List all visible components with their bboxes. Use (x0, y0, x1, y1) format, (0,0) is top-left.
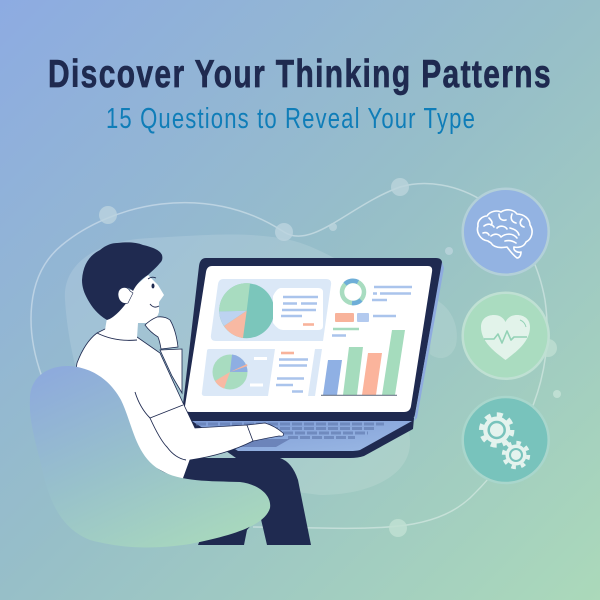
dashboard: top pie panel (211, 279, 331, 341)
network node (391, 178, 409, 196)
person (70, 242, 311, 545)
dashboard: donut chart (342, 281, 364, 303)
raised forearm cuff (160, 349, 182, 393)
network node (99, 206, 117, 224)
torso and shirt (70, 328, 253, 482)
laptop base (186, 418, 414, 458)
keyboard keys (196, 424, 384, 438)
laptop screen (185, 266, 432, 412)
icon: heart with pulse in green circle (463, 293, 549, 379)
hand on chin (145, 317, 178, 349)
dashboard: small colour tags (335, 313, 369, 322)
network node (275, 223, 293, 241)
dashboard: lower pie panel (202, 349, 275, 396)
icon: gears in teal circle (463, 397, 549, 483)
legs (180, 458, 311, 545)
pie chart (219, 283, 274, 338)
laptop keyboard deck (192, 421, 412, 451)
icon: brain in blue circle (463, 189, 549, 275)
armchair (30, 366, 270, 547)
callout card (273, 288, 323, 330)
small pie chart (212, 354, 248, 390)
dashboard: legend lines (332, 287, 412, 336)
bar chart (321, 330, 405, 395)
laptop trackpad (240, 439, 290, 447)
subtitle: 15 Questions to Reveal Your Type (106, 103, 476, 135)
network node (553, 390, 561, 398)
neck and face (105, 275, 164, 338)
laptop (182, 258, 444, 458)
network node (445, 247, 453, 255)
shirt details (97, 333, 186, 460)
dashboard: text lines (276, 353, 308, 392)
network node (539, 339, 557, 357)
laptop lid (182, 258, 442, 421)
eye and smile (148, 277, 159, 307)
background blobs (65, 235, 457, 495)
dashboard: divider strip (308, 349, 322, 396)
hand on keyboard (247, 423, 284, 441)
hair (82, 242, 162, 320)
network node (389, 519, 407, 537)
connecting network lines and nodes (31, 178, 561, 537)
ear (118, 287, 133, 303)
network node (329, 223, 337, 231)
